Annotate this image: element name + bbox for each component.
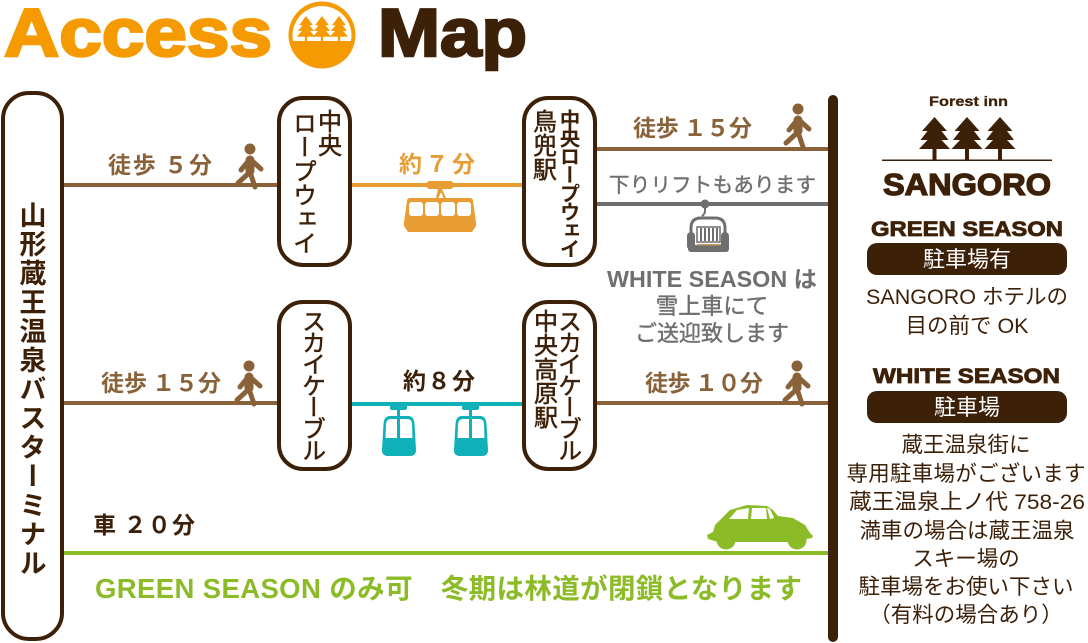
walk time: ropeway to hotel: 徒歩 １５分 — [633, 109, 752, 143]
panel: sky cable: スカイケーブル — [296, 309, 332, 460]
lift note: 下りリフトもあります — [609, 168, 816, 198]
heading: white season: WHITE SEASON — [873, 365, 1060, 388]
white season note: 雪上車にて — [656, 289, 768, 321]
icon: walker 4 — [785, 360, 808, 404]
heading: green season: GREEN SEASON — [871, 218, 1063, 241]
badge: parking available — [867, 242, 1067, 275]
logo: sangoro: Forest inn — [929, 93, 1008, 109]
icon: chair lift — [687, 200, 729, 252]
panel: sky cable — [279, 302, 350, 469]
green season parking text: 目の前で OK — [905, 314, 1029, 338]
icon: walker 2 — [786, 104, 809, 147]
badge: parking — [867, 390, 1067, 423]
white season note: ご送迎致します — [635, 316, 789, 348]
white season parking text: 専用駐車場がございます — [846, 461, 1086, 486]
icon: walker 3 — [237, 360, 260, 404]
icon: sky cable gondola 2 — [454, 405, 488, 456]
white season parking text: 蔵王温泉上ノ代 758-26 — [849, 490, 1085, 514]
walk time: cable to hotel: 徒歩 １０分 — [645, 364, 763, 398]
panel: sky cable chuo kogen station: 中央高原駅 — [528, 309, 564, 429]
panel: chuo ropeway: 中央 — [312, 109, 348, 157]
icon: sky cable gondola 1 — [382, 405, 416, 456]
route lines — [64, 149, 830, 553]
white season parking text: スキー場の — [912, 547, 1020, 571]
white season parking text: （有料の場合あり） — [869, 603, 1063, 627]
logo: sangoro — [882, 93, 1052, 202]
logo: sangoro: SANGORO — [883, 167, 1051, 202]
panel: bus terminal: 山形蔵王温泉バスターミナル — [14, 201, 52, 578]
white season parking text: 満車の場合は蔵王温泉 — [859, 519, 1075, 543]
green season parking text — [866, 285, 1068, 338]
icon: forest badge — [288, 2, 356, 68]
walk time: bus to cable: 徒歩 １５分 — [101, 364, 221, 398]
badge: parking: 駐車場 — [934, 390, 1000, 422]
panel: bus terminal — [3, 93, 62, 639]
title — [4, 0, 527, 71]
drive time: 車 ２０分 — [93, 506, 195, 540]
panel: sky cable chuo kogen station: スカイケーブル — [552, 309, 588, 460]
panel: chuo ropeway: ロープウェイ — [288, 111, 322, 255]
walk time: bus to ropeway: 徒歩 ５分 — [108, 146, 212, 180]
panel: hotel info — [846, 93, 1086, 627]
panel: sky cable chuo kogen station — [524, 302, 595, 469]
green season parking text: SANGORO ホテルの — [866, 285, 1068, 309]
white season parking text — [846, 433, 1086, 627]
white season note: WHITE SEASON は — [607, 266, 817, 292]
cable time: ropeway: 約７分 — [399, 145, 475, 179]
badge: parking available: 駐車場有 — [923, 242, 1011, 274]
panel: chuo ropeway eboshi station: 鳥兜駅 — [528, 109, 562, 181]
icon: walker 1 — [238, 144, 261, 187]
panel: chuo ropeway eboshi station — [524, 98, 595, 265]
white season parking text: 駐車場をお使い下さい — [858, 575, 1074, 599]
green season road note: GREEN SEASON のみ可 冬期は林道が閉鎖となります — [95, 573, 802, 604]
icon: car — [707, 505, 813, 550]
panel: chuo ropeway — [279, 98, 350, 265]
icon: ropeway gondola — [404, 181, 476, 232]
cable time: sky cable: 約８分 — [403, 362, 475, 396]
white season parking text: 蔵王温泉街に — [901, 433, 1031, 457]
vertical divider — [828, 95, 838, 642]
white season note — [607, 266, 817, 348]
panel: chuo ropeway eboshi station: 中央ロープウェイ — [555, 109, 585, 258]
